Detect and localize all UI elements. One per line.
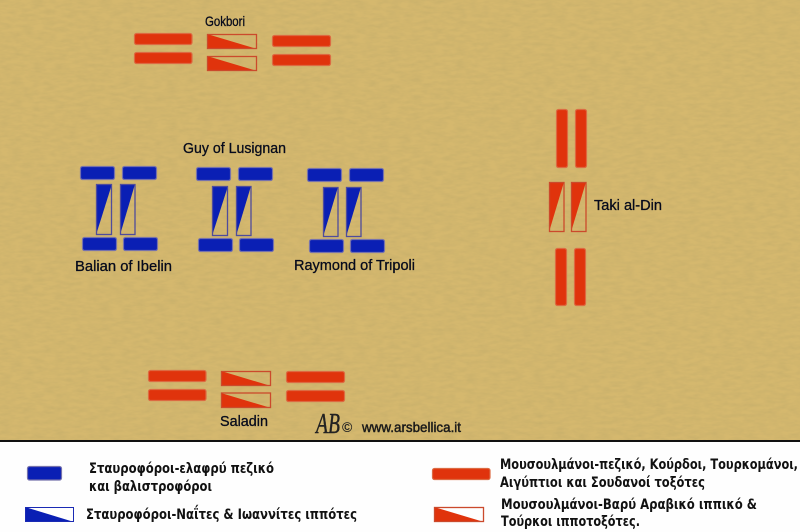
- label: Saladin: Saladin: [220, 414, 268, 430]
- label: Raymond of Tripoli: Raymond of Tripoli: [294, 258, 415, 274]
- right infantry: [272, 36, 330, 66]
- central cavalry: [221, 371, 271, 408]
- watermark: AB arsbellica: ©: [342, 419, 353, 435]
- Guy of Lusignan division: [183, 141, 286, 252]
- knights: [323, 187, 361, 237]
- top infantry: [80, 166, 156, 180]
- watermark: AB arsbellica: [315, 408, 461, 440]
- top infantry: [308, 168, 384, 182]
- label: Taki al-Din: Taki al-Din: [594, 198, 662, 214]
- Gokbori division: [134, 14, 330, 71]
- legend: crusader light infantry: [28, 461, 274, 495]
- legend: muslim heavy cavalry: [434, 497, 757, 530]
- bottom infantry: [82, 238, 158, 250]
- Raymond of Tripoli division: [294, 168, 415, 274]
- top infantry: [556, 110, 586, 168]
- legend: muslim infantry: Αιγύπτιοι και Σουδανοί τοξότες: [500, 475, 705, 491]
- legend: crusader knights: Σταυροφόροι-Ναΐτες & Ιωαννίτες ιππότες: [86, 505, 357, 523]
- Saladin division: [148, 370, 344, 430]
- left infantry: [134, 34, 192, 64]
- legend: crusader light infantry: και βαλιστροφόροι: [89, 479, 212, 495]
- watermark: AB arsbellica: AB: [315, 408, 340, 440]
- left infantry: [148, 370, 206, 400]
- right infantry: [286, 372, 344, 402]
- central cavalry: [207, 34, 257, 71]
- bottom infantry: [198, 238, 274, 252]
- bottom infantry: [310, 240, 384, 252]
- label: Gokbori: Gokbori: [205, 14, 245, 29]
- legend: muslim infantry: [432, 457, 798, 491]
- bottom infantry: [556, 248, 586, 306]
- knights: [96, 184, 135, 235]
- watermark: AB arsbellica: www.arsbellica.it: [361, 419, 461, 435]
- legend panel: [0, 440, 800, 532]
- legend: muslim heavy cavalry: Τούρκοι ιπποτοξότες.: [501, 514, 640, 530]
- Balian of Ibelin division: [75, 166, 172, 275]
- label: Guy of Lusignan: Guy of Lusignan: [183, 141, 286, 157]
- legend: crusader knights: [25, 505, 357, 523]
- label: Balian of Ibelin: Balian of Ibelin: [75, 259, 172, 275]
- legend: muslim heavy cavalry: Μουσουλμάνοι-Βαρύ Αραβικό ιππικό &: [501, 497, 757, 513]
- Taki al-Din division: [549, 110, 662, 306]
- knights: [212, 186, 251, 236]
- central cavalry: [549, 182, 586, 232]
- top infantry: [196, 168, 272, 180]
- legend: crusader light infantry: Σταυροφόροι-ελαφρύ πεζικό: [89, 461, 274, 477]
